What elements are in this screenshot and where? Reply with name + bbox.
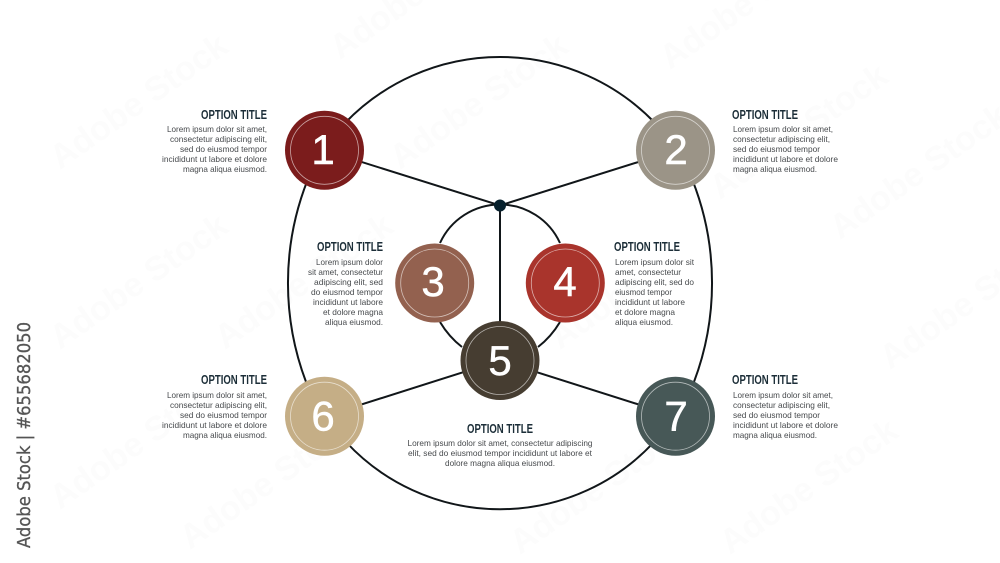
text block: option 7: OPTION TITLE bbox=[732, 373, 798, 387]
text block: option 2: incididunt ut labore et dolore bbox=[733, 154, 838, 164]
text block: option 2: Lorem ipsum dolor sit amet, bbox=[733, 124, 833, 134]
background watermark: Adobe Stock bbox=[43, 206, 235, 357]
central hub dot bbox=[494, 200, 506, 212]
text block: option 4 bbox=[614, 240, 695, 327]
background watermark: Adobe Stock bbox=[43, 366, 235, 517]
text block: option 3: sit amet, consectetur bbox=[308, 267, 383, 277]
text block: option 1: consectetur adipiscing elit, bbox=[170, 134, 267, 144]
text block: option 7: Lorem ipsum dolor sit amet, bbox=[733, 390, 833, 400]
background watermark: Adobe Stock bbox=[383, 26, 575, 177]
option 1 circle bbox=[285, 111, 364, 190]
background watermark: Adobe Stock bbox=[43, 26, 235, 177]
text block: option 4: aliqua eiusmod. bbox=[615, 317, 673, 327]
text block: option 3: Lorem ipsum dolor bbox=[316, 257, 383, 267]
text block: option 7: sed do eiusmod tempor bbox=[733, 410, 820, 420]
option 3 circle: 3 bbox=[421, 258, 445, 305]
inner ring connector bbox=[440, 204, 560, 347]
text block: option 6 bbox=[162, 373, 267, 440]
text block: option 4: incididunt ut labore bbox=[615, 297, 685, 307]
background watermark: Adobe Stock bbox=[503, 411, 695, 562]
text block: option 2: OPTION TITLE bbox=[732, 108, 798, 122]
text block: option 1: sed do eiusmod tempor bbox=[180, 144, 267, 154]
option 7 circle bbox=[636, 377, 715, 456]
text block: option 7: consectetur adipiscing elit, bbox=[733, 400, 830, 410]
text block: option 6: incididunt ut labore et dolore bbox=[162, 420, 267, 430]
background watermark: Adobe Stock bbox=[173, 406, 365, 557]
text block: option 2: magna aliqua eiusmod. bbox=[733, 164, 817, 174]
background watermark: Adobe bbox=[543, 265, 651, 357]
text block: option 4: OPTION TITLE bbox=[614, 240, 680, 254]
text block: option 3: OPTION TITLE bbox=[317, 240, 383, 254]
text block: option 6: sed do eiusmod tempor bbox=[180, 410, 267, 420]
option 4 circle bbox=[526, 244, 605, 322]
text block: option 6: consectetur adipiscing elit, bbox=[170, 400, 267, 410]
text block: option 5: Lorem ipsum dolor sit amet, consectetur adipiscing bbox=[408, 438, 593, 448]
text block: option 4: adipiscing elit, sed do bbox=[615, 277, 694, 287]
option 5 circle: 5 bbox=[488, 337, 512, 384]
text block: option 3: aliqua eiusmod. bbox=[325, 317, 383, 327]
text block: option 5: OPTION TITLE bbox=[467, 422, 533, 436]
text block: option 4: eiusmod tempor bbox=[615, 287, 672, 297]
option 3 circle bbox=[395, 244, 474, 322]
text block: option 1 bbox=[162, 108, 267, 174]
text block: option 3 bbox=[308, 240, 383, 327]
text block: option 1: OPTION TITLE bbox=[201, 108, 267, 122]
option 7 circle: 7 bbox=[664, 392, 688, 440]
text block: option 3: et dolore magna bbox=[323, 307, 383, 317]
background watermark: Adobe Stock bbox=[208, 206, 400, 357]
background watermark: Adobe Stock bbox=[703, 56, 895, 207]
option 4 circle: 4 bbox=[553, 258, 577, 305]
background watermark: Adobe Stock bbox=[713, 411, 905, 562]
text block: option 6: Lorem ipsum dolor sit amet, bbox=[167, 390, 267, 400]
spoke lines bbox=[324, 150, 676, 416]
text block: option 1: incididunt ut labore et dolore bbox=[162, 154, 267, 164]
option 5 circle bbox=[460, 321, 540, 400]
text block: option 3: do eiusmod tempor bbox=[311, 287, 383, 297]
text block: option 3: adipiscing elit, sed bbox=[314, 277, 383, 287]
text block: option 2 bbox=[732, 108, 838, 174]
text block: option 4: Lorem ipsum dolor sit bbox=[615, 257, 695, 267]
text block: option 7: magna aliqua eiusmod. bbox=[733, 430, 817, 440]
option 2 circle bbox=[636, 111, 715, 190]
text block: option 5 bbox=[408, 422, 593, 468]
option 1 circle: 1 bbox=[311, 126, 335, 173]
option 6 circle bbox=[285, 377, 364, 456]
option 6 circle: 6 bbox=[311, 392, 335, 440]
text block: option 6: OPTION TITLE bbox=[201, 373, 267, 387]
option 2 circle: 2 bbox=[664, 126, 688, 173]
text block: option 5: elit, sed do eiusmod tempor incididunt ut labore et bbox=[408, 448, 593, 458]
stock image side label: Adobe Stock | #655682050 bbox=[14, 322, 35, 548]
text block: option 5: dolore magna aliqua eiusmod. bbox=[445, 458, 555, 468]
text block: option 7 bbox=[732, 373, 838, 440]
text block: option 1: magna aliqua eiusmod. bbox=[183, 164, 267, 174]
text block: option 4: amet, consectetur bbox=[615, 267, 681, 277]
text block: option 7: incididunt ut labore et dolore bbox=[733, 420, 838, 430]
text block: option 2: sed do eiusmod tempor bbox=[733, 144, 820, 154]
text block: option 1: Lorem ipsum dolor sit amet, bbox=[167, 124, 267, 134]
text block: option 3: incididunt ut labore bbox=[313, 297, 383, 307]
text block: option 6: magna aliqua eiusmod. bbox=[183, 430, 267, 440]
outer ring connector bbox=[288, 57, 712, 509]
text block: option 2: consectetur adipiscing elit, bbox=[733, 134, 830, 144]
text block: option 4: et dolore magna bbox=[615, 307, 675, 317]
